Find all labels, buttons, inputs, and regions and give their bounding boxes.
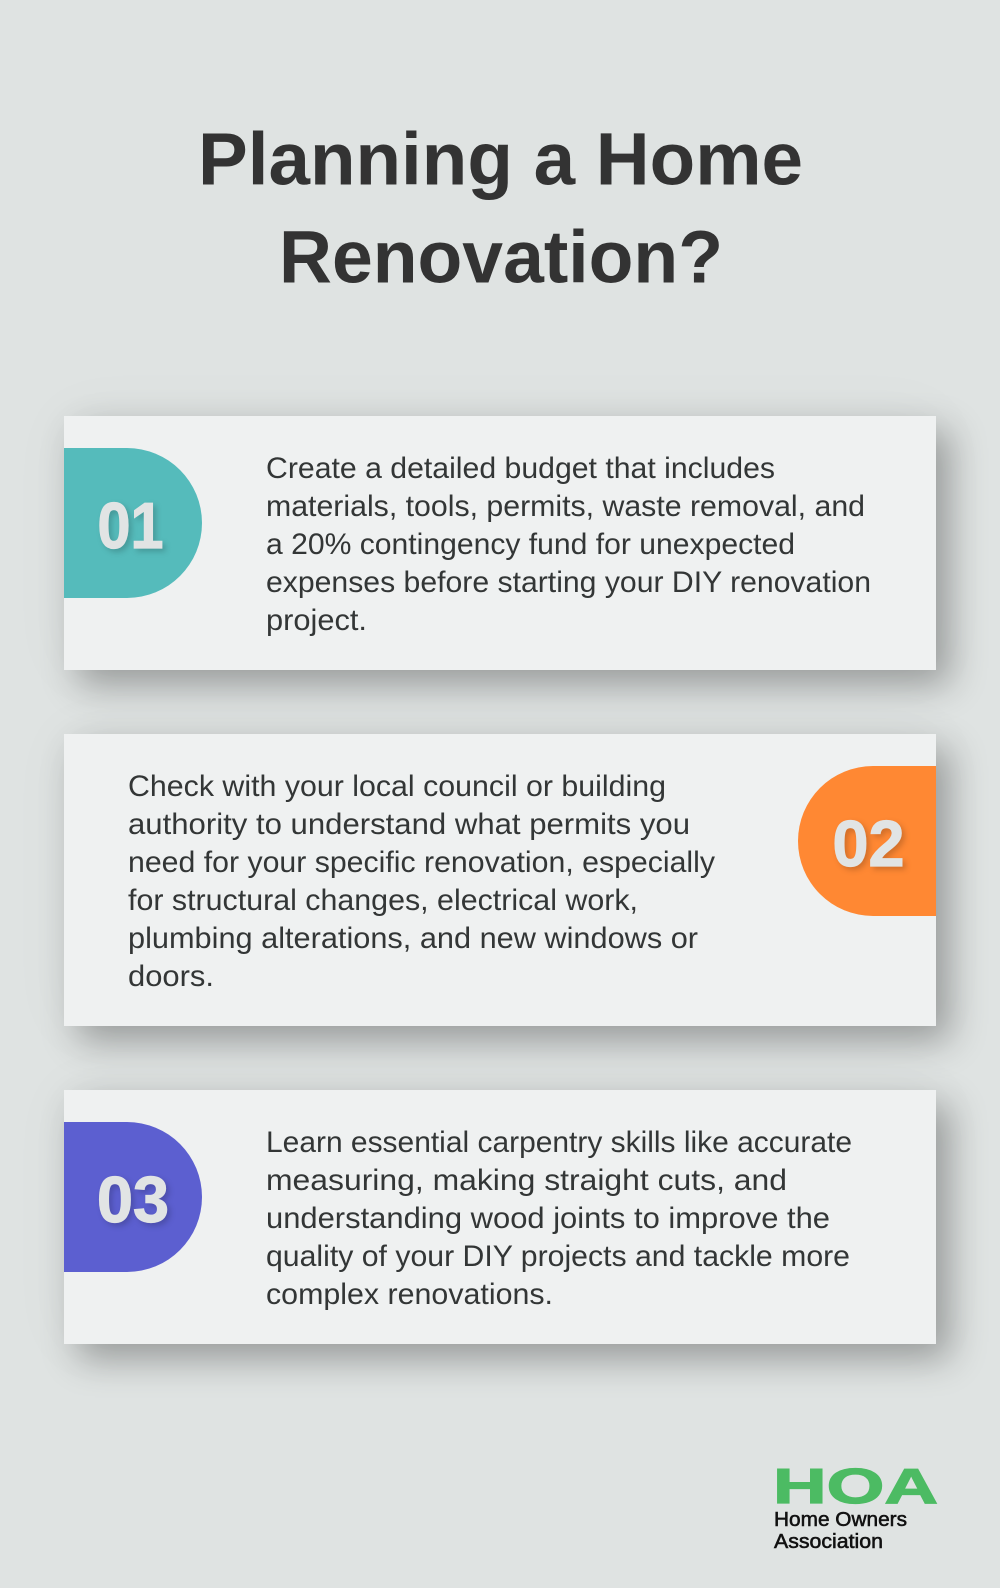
title: Renovation? [279,216,723,298]
logo: HOA Home Owners Association: Association [774,1531,883,1553]
text: step 02 description: authority to understand what permits you [128,808,690,841]
badge: 01: 01 [98,489,164,562]
text: step 03 description: quality of your DIY projects and tackle more [266,1240,850,1273]
text: step 03 description: understanding wood joints to improve the [266,1202,830,1235]
text: step 03 description: measuring, making straight cuts, and [266,1164,787,1197]
text: step 01 description: Create a detailed budget that includes [266,452,775,485]
badge: 01 [64,448,202,598]
text: step 01 description [266,452,871,637]
text: step 02 description: plumbing alterations, and new windows or [128,922,698,955]
panel: step 02 permits [64,734,936,1026]
title [198,118,803,298]
text: step 01 description: expenses before starting your DIY renovation [266,566,871,599]
text: step 03 description: Learn essential carpentry skills like accurate [266,1126,852,1159]
text: step 02 description [128,770,715,993]
logo: HOA Home Owners Association: Home Owners [774,1509,907,1531]
logo: HOA Home Owners Association [773,1460,938,1553]
text: step 02 description: doors. [128,960,214,993]
badge: 02: 02 [832,807,904,880]
panel: step 01 budget [64,416,936,670]
text: step 02 description: Check with your local council or building [128,770,666,803]
text: step 01 description: a 20% contingency fund for unexpected [266,528,795,561]
text: step 02 description: for structural changes, electrical work, [128,884,638,917]
text: step 02 description: need for your specific renovation, especially [128,846,715,879]
text: step 03 description [266,1126,852,1311]
panel: step 03 skills [64,1090,936,1344]
title: Planning a Home [198,118,803,200]
logo: HOA Home Owners Association: HOA [773,1460,938,1514]
text: step 01 description: materials, tools, permits, waste removal, and [266,490,865,523]
text: step 03 description: complex renovations. [266,1278,553,1311]
badge: 03 [64,1122,202,1272]
text: step 01 description: project. [266,604,367,637]
badge: 02 [798,766,936,916]
badge: 03: 03 [97,1163,169,1236]
